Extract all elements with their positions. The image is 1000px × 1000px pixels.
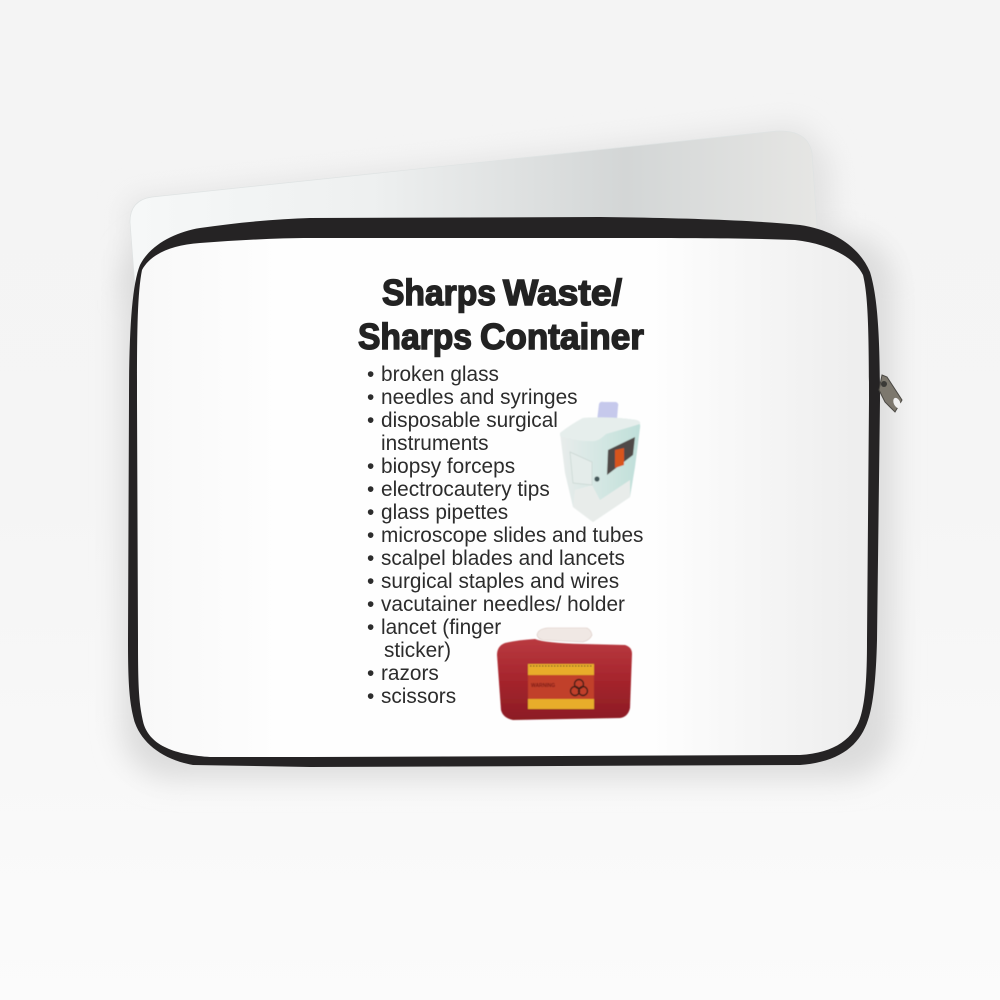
icon: red sharps container (497, 628, 632, 720)
bullet list: • (367, 409, 374, 432)
bullet list: • (367, 386, 374, 409)
laptop (130, 131, 818, 300)
bullet list: scissors (381, 685, 456, 708)
title (358, 272, 644, 357)
bullet list: • (367, 501, 374, 524)
bullet list (367, 363, 643, 708)
bullet list: scalpel blades and lancets (381, 547, 625, 570)
title: Sharps (358, 316, 472, 357)
red body (497, 639, 632, 720)
label: WARNING (531, 683, 555, 689)
sleeve white fabric (137, 238, 869, 757)
bullet list: • (367, 455, 374, 478)
bullet list: glass pipettes (381, 501, 508, 524)
title: Sharps (382, 272, 496, 313)
bullet list: instruments (381, 432, 488, 455)
bullet list: broken glass (381, 363, 499, 386)
bullet list: disposable surgical (381, 409, 558, 432)
title: Container (480, 316, 644, 357)
bullet list: microscope slides and tubes (381, 524, 643, 547)
sleeve (128, 217, 880, 767)
bullet list: • (367, 547, 374, 570)
lid (537, 628, 592, 642)
bullet list: • (367, 363, 374, 386)
bullet list: • (367, 524, 374, 547)
bullet list: • (367, 570, 374, 593)
laptop shadow (128, 125, 835, 300)
bullet list: biopsy forceps (381, 455, 515, 478)
sleeve black edge (128, 217, 880, 767)
bullet list: electrocautery tips (381, 478, 550, 501)
bullet list: • (367, 593, 374, 616)
sleeve shadow (122, 235, 894, 779)
bullet list: needles and syringes (381, 386, 578, 409)
bullet list: • (367, 685, 374, 708)
title: Waste/ (503, 272, 622, 313)
biohazard symbol (570, 680, 588, 696)
icon: wall-mounted sharps container (560, 402, 640, 522)
bullet list: surgical staples and wires (381, 570, 619, 593)
zipper pull (879, 375, 902, 412)
bullet list: • (367, 478, 374, 501)
bullet list: razors (381, 662, 439, 685)
bullet list: vacutainer needles/ holder (381, 593, 625, 616)
bullet list: • (367, 616, 374, 639)
bullet list: • (367, 662, 374, 685)
bullet list: lancet (finger (381, 616, 501, 639)
bullet list: sticker) (384, 639, 451, 662)
